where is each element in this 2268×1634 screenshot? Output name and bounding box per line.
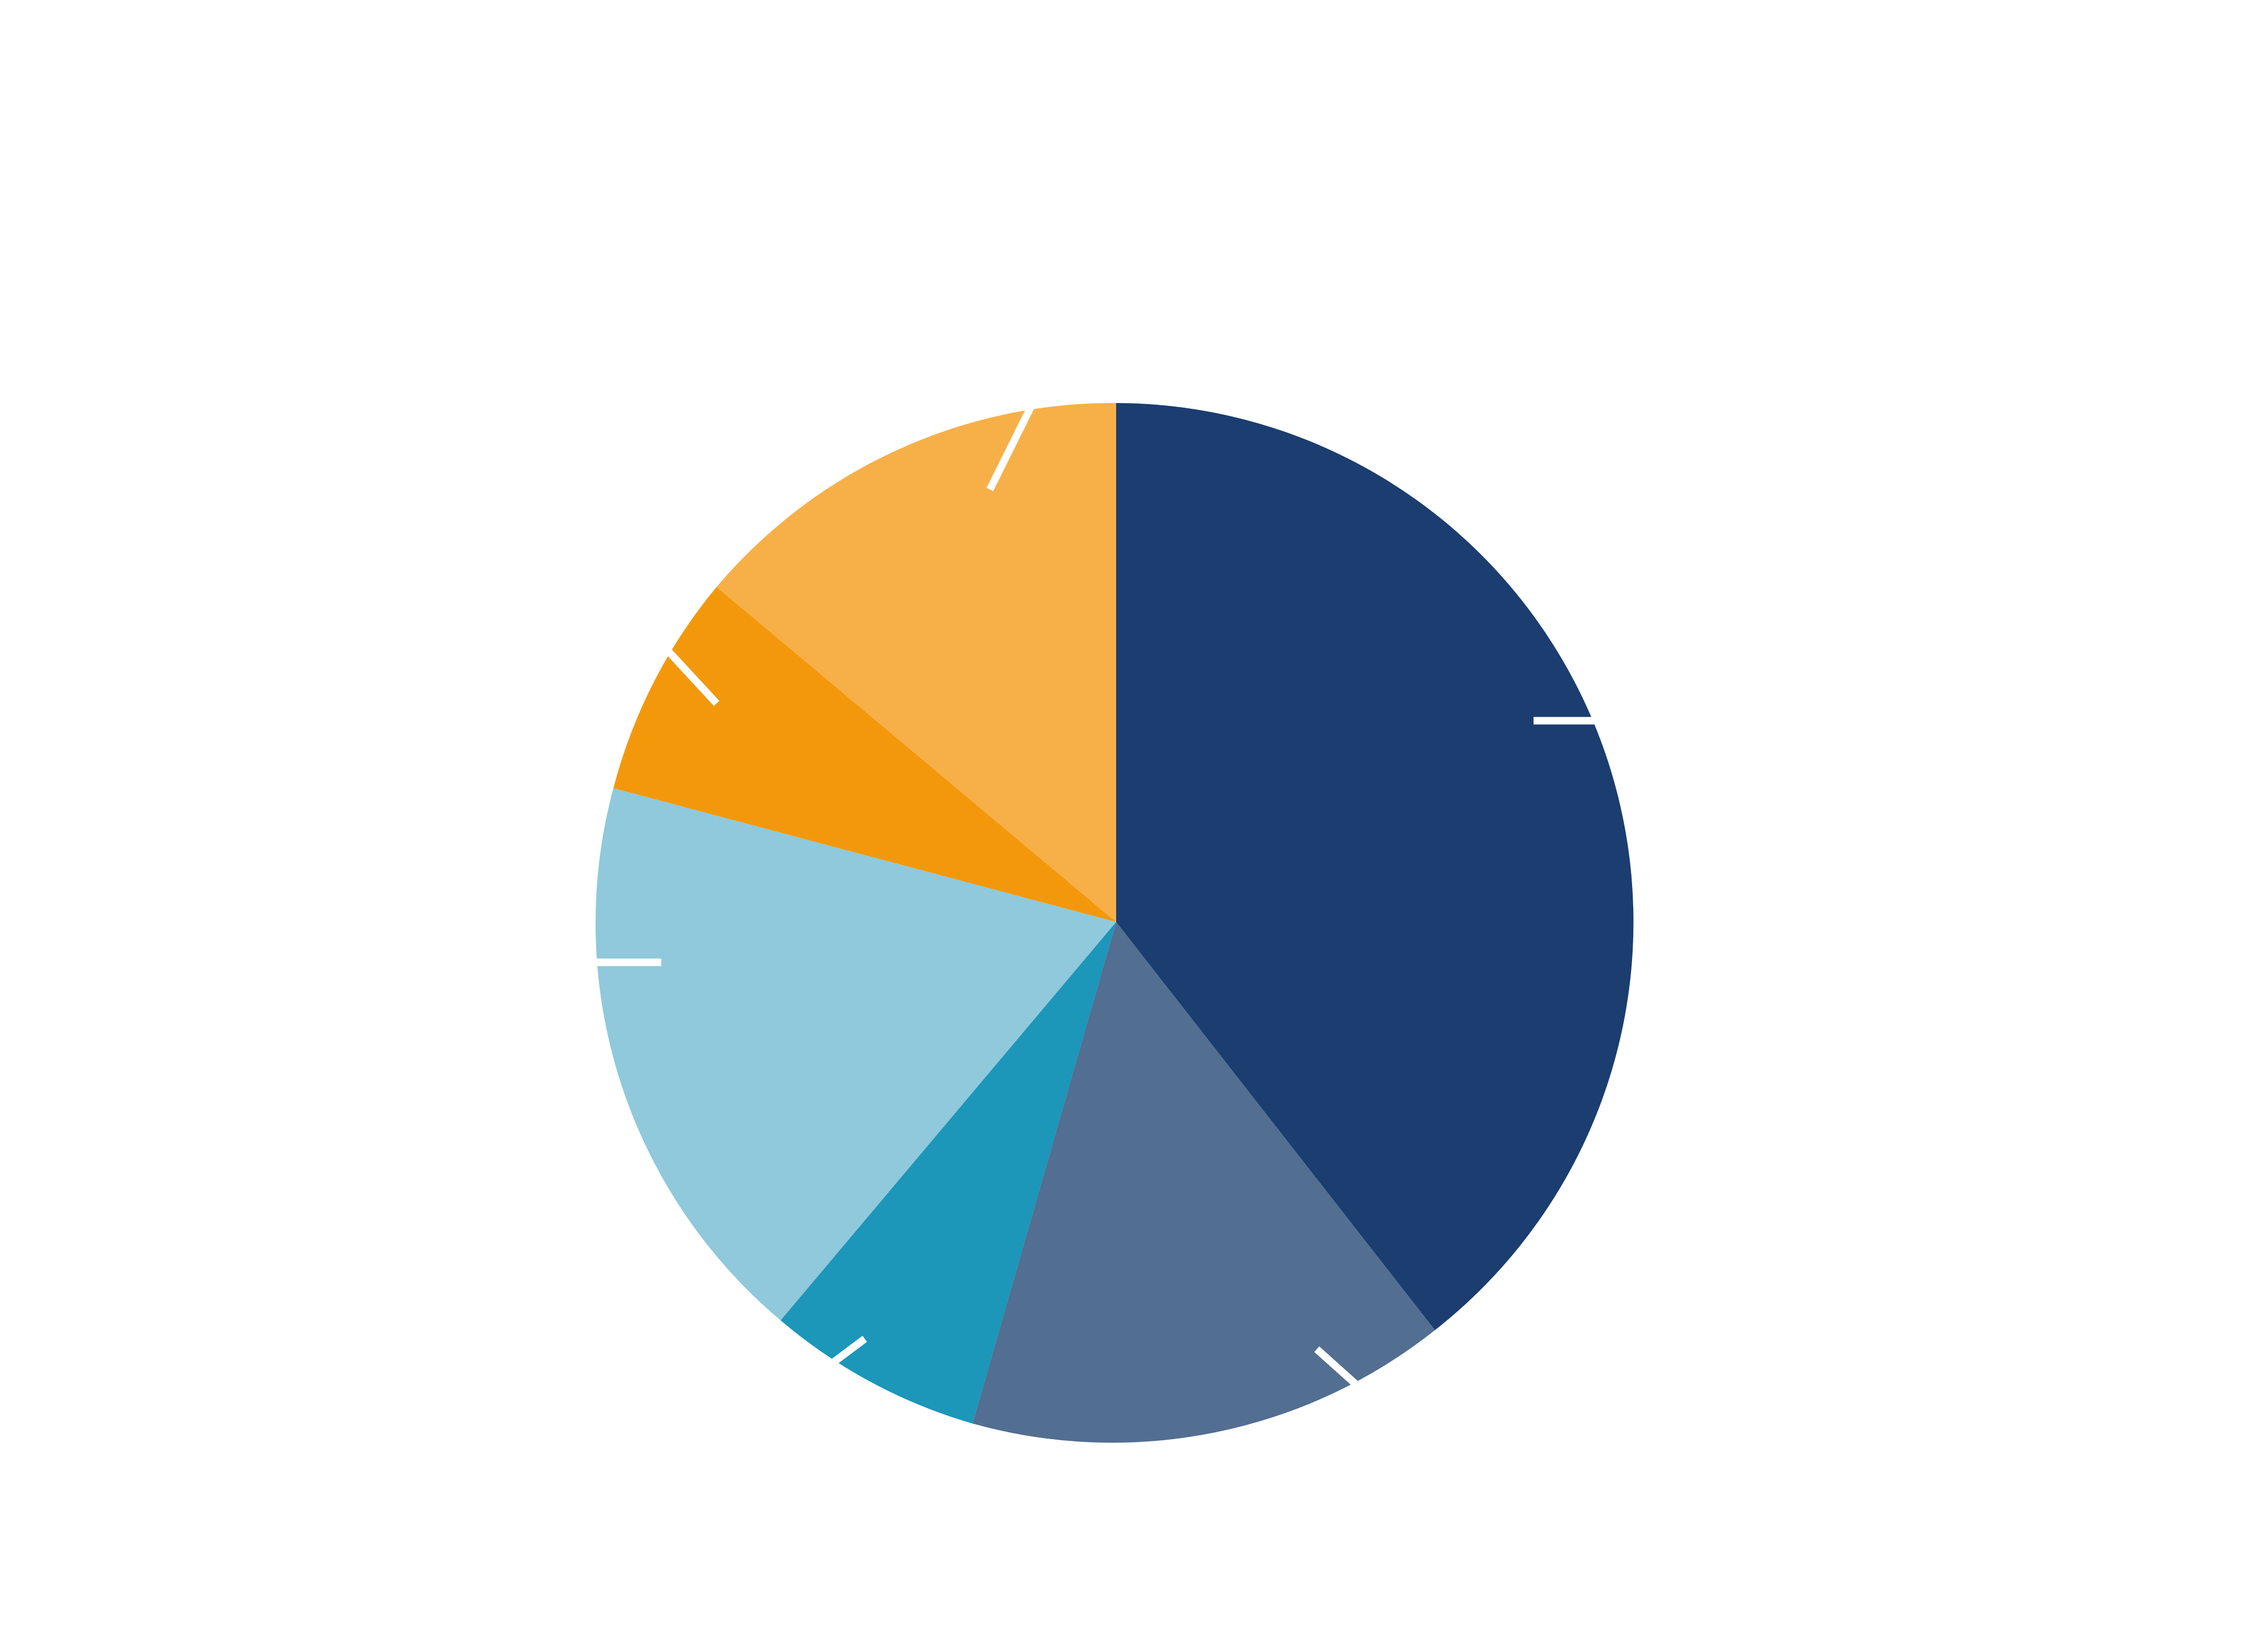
slice: light orange [717, 403, 1116, 922]
pie slices [596, 403, 1633, 1443]
slice: dark navy [1116, 403, 1633, 1330]
slice: slate blue [973, 922, 1435, 1443]
slice: orange [613, 587, 1116, 922]
slice: light blue [596, 788, 1116, 1320]
label tick marks [589, 402, 1604, 1390]
slice: teal [781, 922, 1116, 1424]
